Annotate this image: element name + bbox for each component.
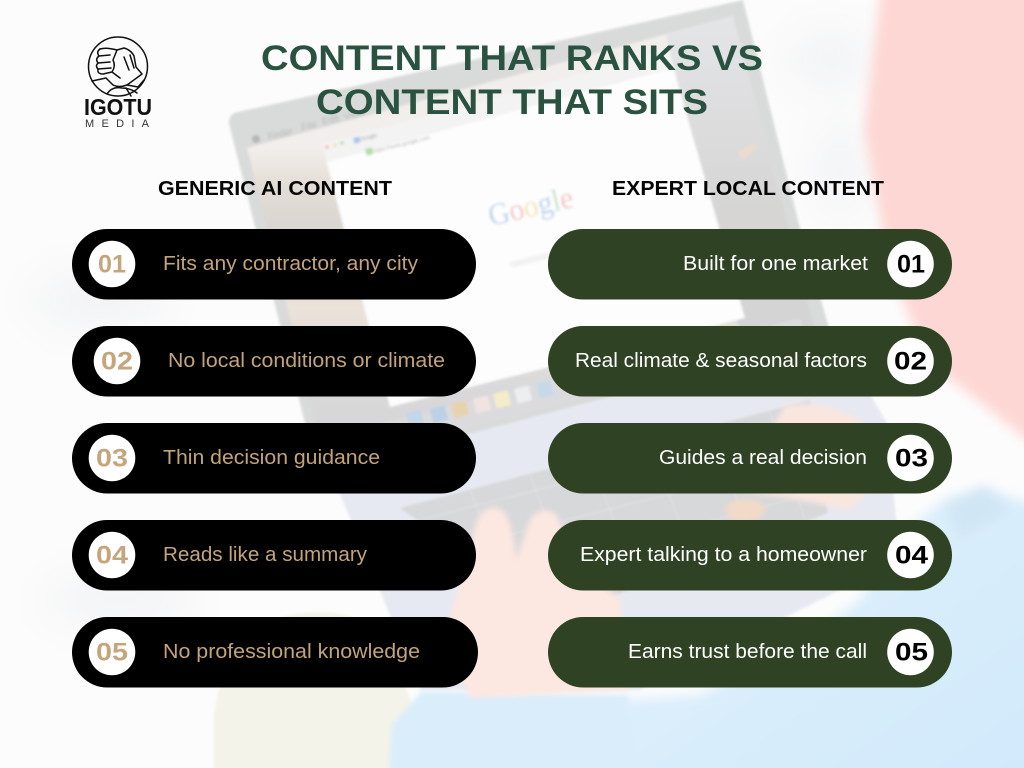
title: CONTENT THAT RANKS VS xyxy=(261,39,763,78)
menu bar text: Edit xyxy=(321,113,341,128)
generic item 02: 02 xyxy=(101,348,133,376)
logo: Igotu Media xyxy=(84,37,152,130)
expert item 05: 05 xyxy=(895,638,928,666)
panel: expert local content list xyxy=(548,229,952,688)
expert item 04: 04 xyxy=(895,542,928,570)
blue sleeve blur xyxy=(610,490,1024,768)
menu bar text xyxy=(267,107,367,143)
panel: generic AI content list xyxy=(72,229,478,688)
generic item 04: Reads like a summary xyxy=(163,544,367,566)
expert item 01 xyxy=(548,229,952,300)
expert item 02 xyxy=(548,326,952,396)
generic item 02 xyxy=(72,326,476,396)
column heading: generic AI content: GENERIC AI CONTENT xyxy=(158,177,392,200)
generic item 03: Thin decision guidance xyxy=(163,447,380,469)
generic item 01: Fits any contractor, any city xyxy=(163,253,418,275)
browser tab and address bar: https://www.google.com xyxy=(373,135,431,155)
browser tab and address bar xyxy=(325,133,431,156)
generic item 05: No professional knowledge xyxy=(163,641,420,663)
logo: Igotu Media: MEDIA xyxy=(85,118,150,130)
generic item 04: 04 xyxy=(96,542,128,570)
generic item 01: 01 xyxy=(98,250,126,278)
generic item 05: 05 xyxy=(96,638,128,666)
expert item 03 xyxy=(548,423,952,494)
generic item 02: No local conditions or climate xyxy=(168,350,445,372)
wordmark: IGOTU xyxy=(84,94,152,120)
column heading: expert local content: EXPERT LOCAL CONTENT xyxy=(612,177,884,200)
expert item 01: 01 xyxy=(897,250,925,278)
title: CONTENT THAT SITS xyxy=(316,83,708,122)
title xyxy=(261,39,763,122)
expert item 04 xyxy=(548,520,952,590)
expert item 05 xyxy=(548,617,952,688)
expert item 02: 02 xyxy=(894,348,927,376)
expert item 05: Earns trust before the call xyxy=(628,641,867,663)
generic item 03 xyxy=(72,423,476,494)
Google logo on screen: Google xyxy=(485,179,576,233)
browser tab and address bar: Google xyxy=(359,133,378,143)
cream hat xyxy=(214,612,425,768)
laptop base xyxy=(300,330,900,690)
laptop screen wallpaper xyxy=(247,16,816,458)
red jacket blur xyxy=(864,0,1024,450)
generic item 04 xyxy=(72,520,476,590)
menu bar text: View xyxy=(343,107,367,123)
generic item 01 xyxy=(72,229,476,300)
generic item 05 xyxy=(72,617,478,688)
hands xyxy=(444,403,888,698)
menu bar text: Finder xyxy=(267,126,295,143)
expert item 01: Built for one market xyxy=(683,253,868,275)
expert item 04: Expert talking to a homeowner xyxy=(580,544,867,566)
expert item 03: Guides a real decision xyxy=(659,447,867,469)
expert item 03: 03 xyxy=(895,444,928,472)
generic item 03: 03 xyxy=(96,444,128,472)
menu bar text: File xyxy=(300,119,319,134)
icon: handshake in circle xyxy=(88,37,148,96)
dock xyxy=(380,318,806,448)
laptop screen bezel xyxy=(229,0,832,474)
keyboard xyxy=(400,400,828,620)
browser window xyxy=(322,50,745,407)
expert item 02: Real climate & seasonal factors xyxy=(575,350,867,372)
